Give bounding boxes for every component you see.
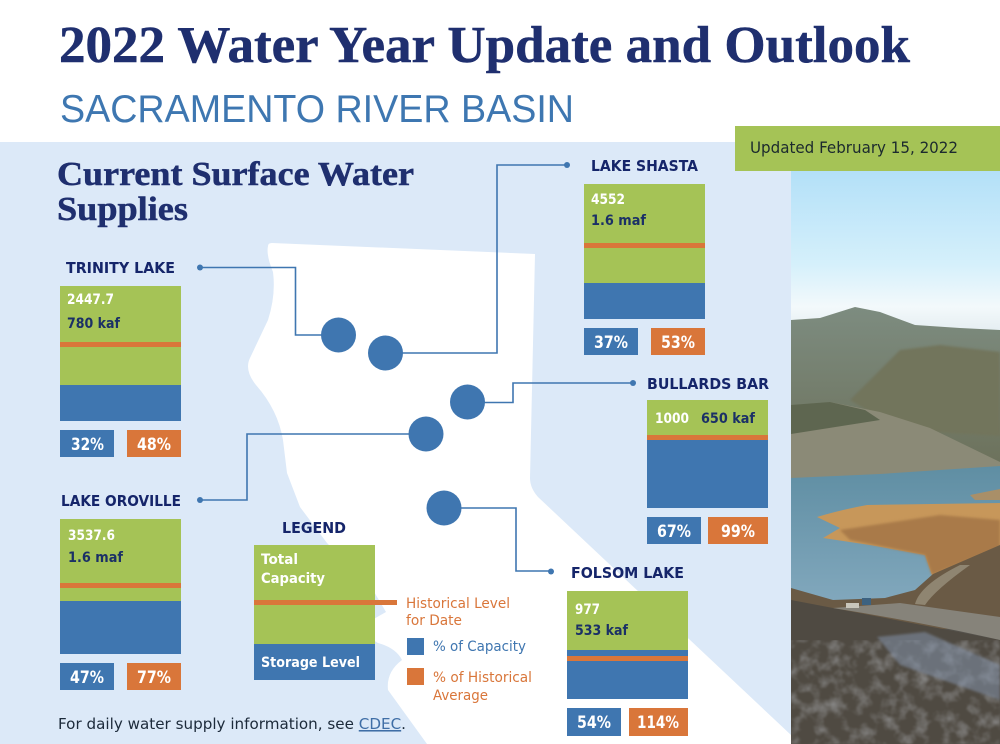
section heading <box>57 156 414 228</box>
section heading: Supplies <box>57 191 188 228</box>
reservoir: Bullards Bar <box>647 375 769 544</box>
reservoir: Bullards Bar: 67% <box>657 522 691 541</box>
reservoir: Lake Oroville <box>60 492 181 690</box>
reservoir: Bullards Bar: 99% <box>721 522 755 541</box>
title: 2022 Water Year Update and Outlook <box>59 17 910 74</box>
footnote: For daily water supply information, see CDEC. <box>58 715 406 733</box>
reservoir: Lake Shasta <box>584 157 705 355</box>
reservoir: Bullards Bar: BULLARDS BAR <box>647 375 769 393</box>
reservoir: Folsom Lake: 114% <box>637 713 679 732</box>
reservoir: Trinity Lake: TRINITY LAKE <box>66 259 175 277</box>
reservoir: Lake Oroville: 47% <box>70 668 104 687</box>
badge: update date: Updated February 15, 2022 <box>750 138 958 157</box>
legend: Storage Level <box>261 655 360 671</box>
reservoir: Folsom Lake: 54% <box>577 713 611 732</box>
legend: Total <box>261 552 298 568</box>
section heading: Current Surface Water <box>57 156 414 193</box>
reservoir: Lake Shasta: 4552 <box>591 192 625 208</box>
legend: Capacity <box>261 571 325 587</box>
badge: update date <box>735 126 1000 171</box>
reservoir: Lake Oroville: 1.6 maf <box>68 550 124 566</box>
reservoir: Lake Oroville: 77% <box>137 668 171 687</box>
reservoir: Trinity Lake: 48% <box>137 435 171 454</box>
reservoir: Bullards Bar: 650 kaf <box>701 411 756 427</box>
legend: % of Capacity <box>433 639 526 655</box>
reservoir: Lake Oroville: LAKE OROVILLE <box>61 492 181 510</box>
panel: light blue background <box>0 142 791 744</box>
reservoir: Trinity Lake: 32% <box>71 435 104 454</box>
reservoir: Lake Shasta: 1.6 maf <box>591 213 647 229</box>
legend: Historical Level <box>406 596 510 612</box>
connector lines and map markers <box>197 162 636 574</box>
panel: lake photograph <box>791 171 1000 744</box>
legend <box>254 519 532 704</box>
reservoir: Trinity Lake: 780 kaf <box>67 316 121 332</box>
legend: Average <box>433 688 488 704</box>
reservoir: Folsom Lake: 533 kaf <box>575 623 629 639</box>
reservoir: Folsom Lake: 977 <box>575 602 600 618</box>
reservoir: Lake Oroville: 3537.6 <box>68 528 115 544</box>
legend: LEGEND <box>282 519 346 537</box>
reservoir: Lake Shasta: 37% <box>594 333 628 352</box>
reservoir: Trinity Lake <box>60 259 181 457</box>
reservoir: Bullards Bar: 1000 <box>655 411 689 427</box>
map: Northern California silhouette <box>248 243 791 744</box>
reservoir: Lake Shasta: 53% <box>661 333 695 352</box>
subtitle: SACRAMENTO RIVER BASIN <box>60 88 574 131</box>
reservoir: Folsom Lake <box>567 564 688 736</box>
reservoir: Folsom Lake: FOLSOM LAKE <box>571 564 684 582</box>
reservoir: Lake Shasta: LAKE SHASTA <box>591 157 698 175</box>
legend: for Date <box>406 613 462 629</box>
legend: % of Historical <box>433 670 532 686</box>
reservoir: Trinity Lake: 2447.7 <box>67 292 114 308</box>
